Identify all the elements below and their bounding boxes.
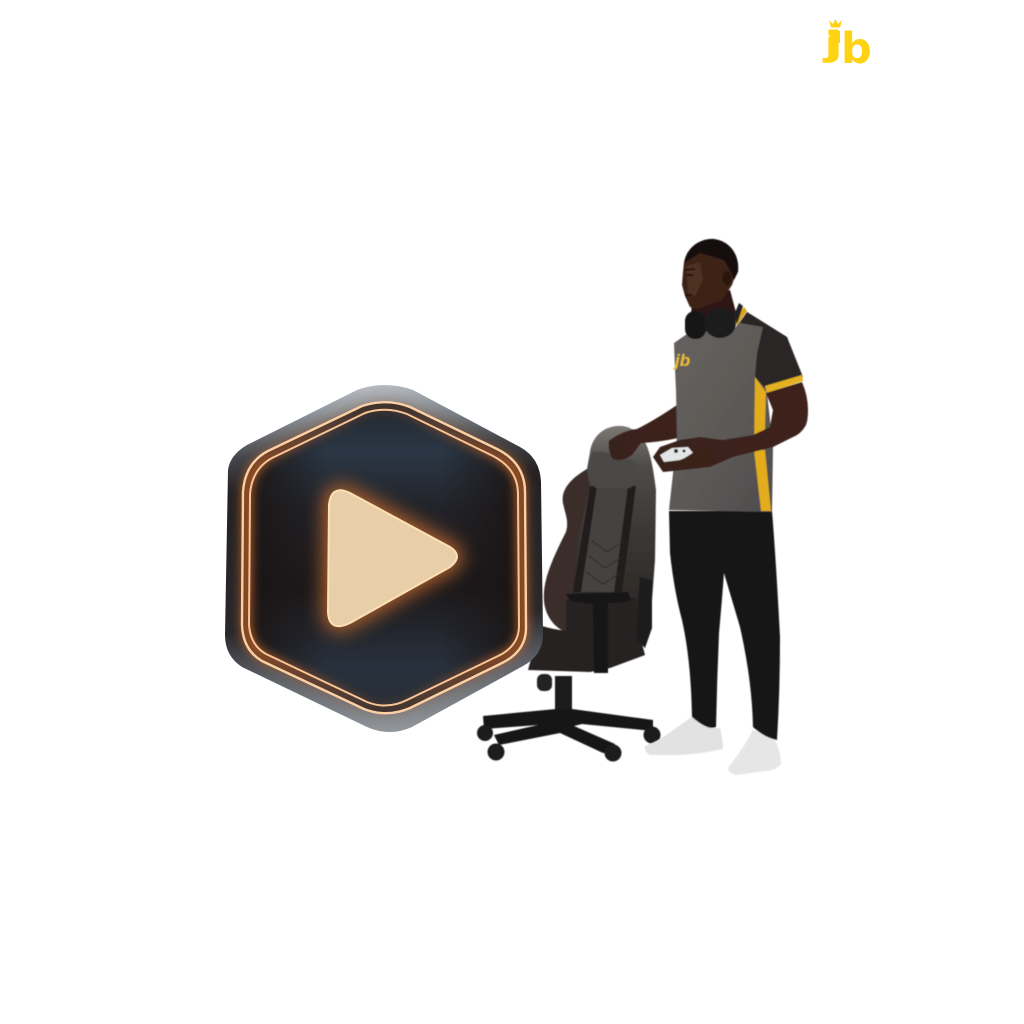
game controller bbox=[660, 447, 694, 462]
dark shoulder and sleeve bbox=[740, 312, 803, 389]
chair back bbox=[544, 426, 656, 640]
chair centre panel and stripes bbox=[576, 485, 630, 592]
man standing with controller bbox=[609, 239, 808, 775]
yellow side stripe bbox=[754, 377, 771, 511]
trousers bbox=[669, 511, 780, 740]
orange line glow bbox=[246, 406, 523, 709]
neon inner line bbox=[249, 410, 519, 706]
triangle glow bbox=[328, 490, 457, 626]
gaming chair bbox=[477, 426, 660, 762]
dark side shading bbox=[242, 402, 526, 713]
chair base bbox=[477, 674, 660, 762]
hexagon play badge bbox=[225, 385, 543, 732]
chair side wing bbox=[544, 469, 590, 632]
armrest bbox=[566, 577, 652, 673]
face highlight bbox=[686, 262, 703, 296]
head bbox=[682, 239, 738, 309]
t-shirt bbox=[669, 307, 803, 512]
near arm and hand bbox=[653, 382, 808, 472]
logo text: b bbox=[841, 24, 872, 74]
yellow sleeve band bbox=[765, 375, 803, 393]
headphones bbox=[685, 303, 743, 339]
badge body bbox=[225, 385, 543, 732]
collar accent bbox=[732, 307, 747, 325]
icon: play triangle bbox=[328, 490, 457, 626]
chest logo: jb bbox=[673, 351, 690, 370]
casters bbox=[477, 725, 660, 762]
neon outer line bbox=[242, 402, 526, 713]
lower back shadow bbox=[566, 598, 640, 640]
neck bbox=[690, 290, 738, 340]
shoes bbox=[645, 716, 781, 775]
headrest bbox=[589, 452, 636, 488]
badge face bbox=[242, 402, 526, 713]
illustration canvas bbox=[225, 19, 870, 775]
hair bbox=[684, 239, 738, 280]
icon: crown bbox=[829, 19, 842, 28]
far arm and hand bbox=[609, 405, 678, 460]
eye and brow bbox=[685, 269, 695, 275]
fingers over controller bbox=[680, 448, 714, 468]
logo text bbox=[823, 24, 872, 74]
ear bbox=[722, 271, 732, 285]
logo: jb with crown bbox=[823, 19, 872, 74]
logo text: j bbox=[823, 24, 842, 63]
lips bbox=[685, 294, 692, 296]
chair seat bbox=[528, 626, 645, 672]
